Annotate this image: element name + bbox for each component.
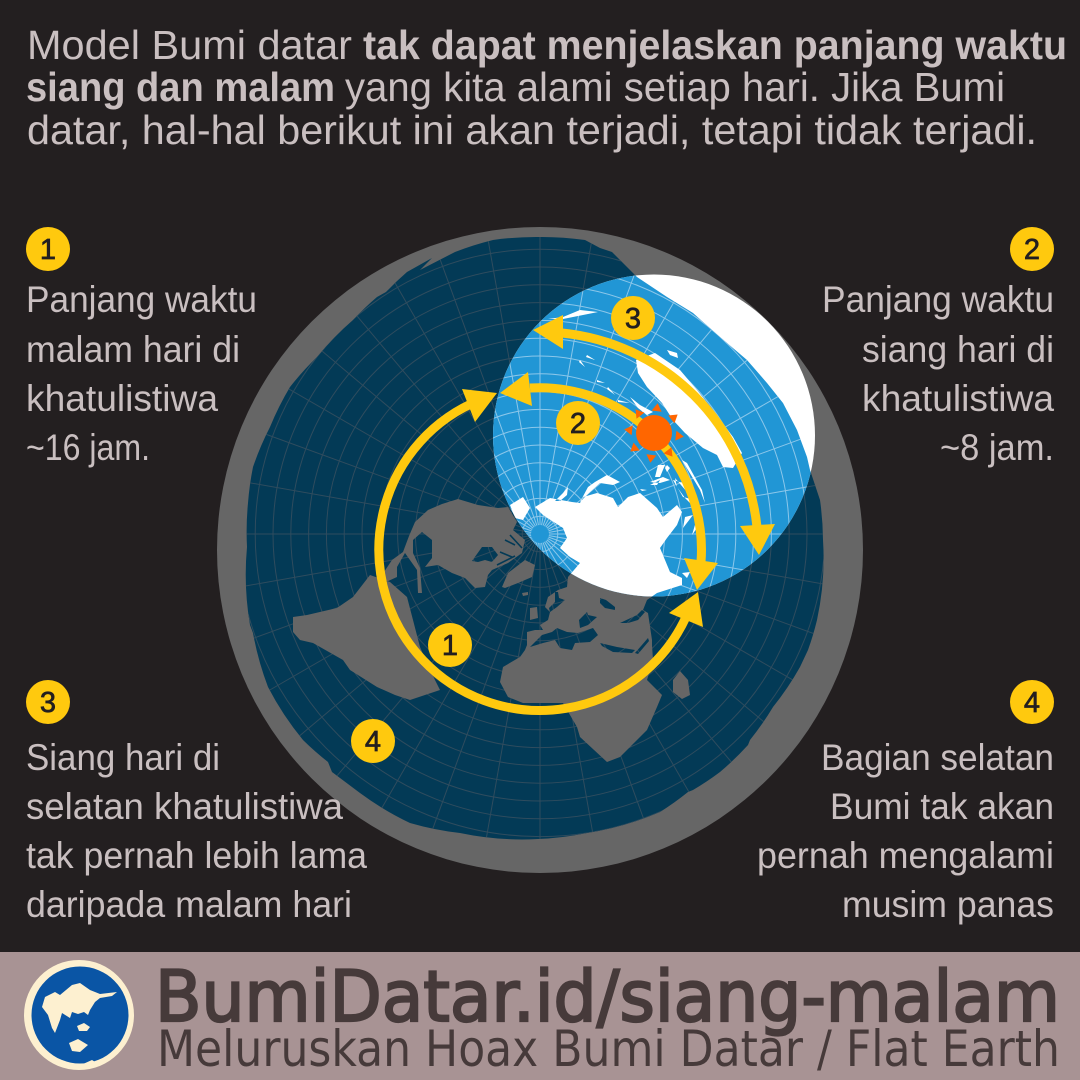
callout 1: Panjang waktu	[26, 279, 257, 320]
map badge 4: 4	[365, 726, 381, 758]
callout 4: Bagian selatan	[821, 737, 1054, 778]
callout 4	[757, 680, 1054, 925]
callout 1: khatulistiwa	[26, 378, 218, 419]
footer url: BumiDatar.id/siang-malam	[155, 956, 1060, 1038]
callout 4: musim panas	[842, 884, 1054, 925]
map badge 3: 3	[625, 303, 641, 335]
flat earth map	[217, 214, 863, 873]
callout 2: 2	[1024, 234, 1040, 266]
callout 2	[822, 227, 1054, 468]
headline: yang kita alami setiap hari. Jika Bumi	[345, 64, 1005, 110]
map badge 3	[611, 296, 655, 340]
callout 2: Panjang waktu	[822, 279, 1054, 320]
arrow 1: night path	[379, 389, 703, 710]
callout 1: ~16 jam.	[26, 427, 150, 468]
map badge 4	[351, 719, 395, 763]
callout 2: siang hari di	[862, 329, 1054, 370]
night continents	[293, 310, 742, 762]
callout 4: pernah mengalami	[757, 835, 1054, 876]
callout 2: khatulistiwa	[862, 378, 1054, 419]
callout 3: 3	[40, 687, 56, 719]
antarctic ice ring	[217, 227, 863, 873]
callout 3	[26, 680, 367, 925]
callout 3: tak pernah lebih lama	[26, 835, 367, 876]
map badge 1	[428, 623, 472, 667]
callout 3: selatan khatulistiwa	[26, 786, 343, 827]
night graticule	[246, 237, 824, 839]
headline: datar, hal-hal berikut ini akan terjadi, tetapi tidak terjadi.	[27, 107, 1037, 153]
headline: Model Bumi datar	[27, 22, 352, 68]
map badge 2: 2	[570, 408, 586, 440]
callout 1: malam hari di	[26, 329, 240, 370]
arrow 3: day path south of the equator	[533, 315, 775, 555]
headline	[26, 22, 1067, 153]
arrow 2: day path on the equator	[500, 372, 718, 590]
footer band	[0, 952, 1080, 1080]
headline: siang dan malam	[26, 64, 335, 110]
icon: globe logo	[24, 960, 134, 1070]
daylight circle	[493, 274, 815, 596]
map badge 2	[556, 401, 600, 445]
callout 4: 4	[1024, 687, 1040, 719]
arctic archipelago channels	[497, 535, 522, 565]
callout 2: ~8 jam.	[940, 427, 1054, 468]
icon: sun	[624, 403, 684, 463]
callout 3: daripada malam hari	[26, 884, 352, 925]
headline: tak dapat menjelaskan panjang waktu	[363, 22, 1067, 68]
callout 3: Siang hari di	[26, 737, 220, 778]
callout 1	[26, 227, 257, 468]
callout 1: 1	[40, 234, 56, 266]
map badge 1: 1	[442, 630, 458, 662]
callout 4: Bumi tak akan	[830, 786, 1054, 827]
night ocean	[246, 237, 824, 839]
